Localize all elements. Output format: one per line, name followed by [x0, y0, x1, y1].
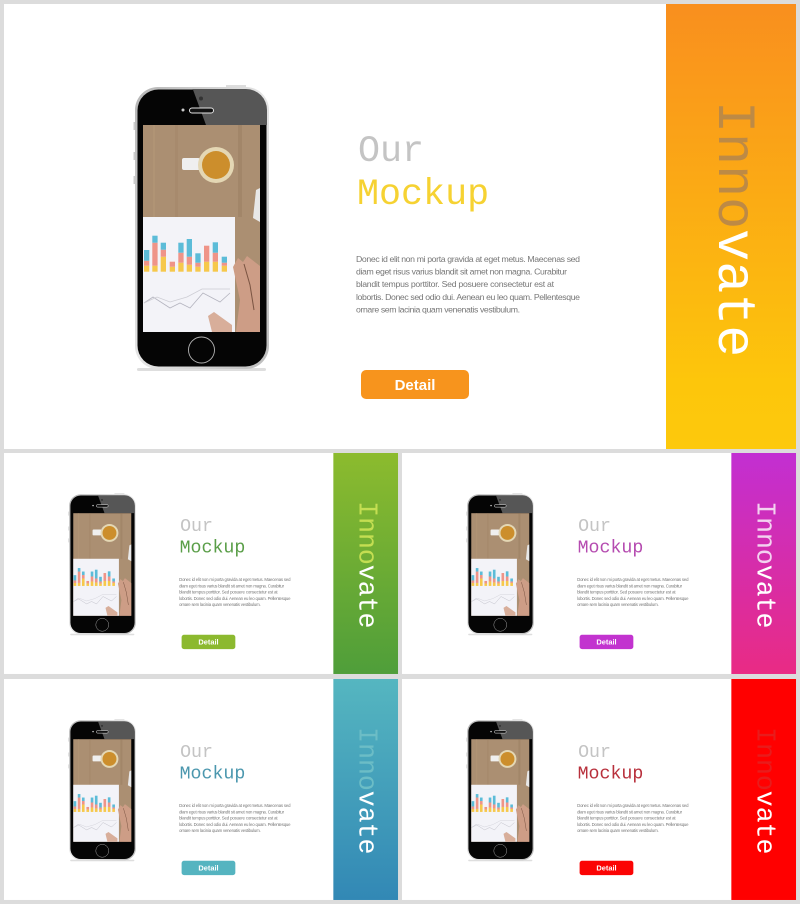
icon: smartphone mockup [466, 493, 534, 635]
button: Detail: Detail [395, 377, 435, 394]
heading: Mockup: Mockup [578, 764, 643, 784]
side band: orange gradient [666, 4, 796, 449]
text block: description: Donec id elit non mi porta gravida at eget metus. Maecenas sed [577, 803, 689, 808]
button: Detail: Detail [198, 638, 219, 647]
panel: green slide [4, 453, 398, 674]
heading: Our: Our [578, 743, 611, 763]
vertical label: Innovate: Inno vate [352, 501, 382, 628]
panel: teal slide [4, 679, 398, 900]
text block: description: Donec id elit non mi porta gravida at eget metus. Maecenas sed [356, 254, 580, 264]
heading: Mockup: Mockup [180, 764, 245, 784]
button: Detail [580, 635, 633, 649]
side band: red [731, 679, 796, 900]
button: Detail [580, 861, 633, 875]
button: Detail [361, 370, 469, 399]
text block: description: diam eget risus varius blandit sit amet non magna. Curabitur [179, 809, 285, 814]
text block: description: ornare sem lacinia quam venenatis vestibulum. [179, 602, 261, 607]
text block: description: lobortis. Donec sed odio dui. Aenean eu leo quam. Pellentesque [577, 822, 689, 827]
text block: description: Donec id elit non mi porta gravida at eget metus. Maecenas sed [179, 803, 291, 808]
panel: red slide [402, 679, 796, 900]
text block: description: ornare sem lacinia quam venenatis vestibulum. [577, 828, 659, 833]
icon: smartphone mockup [466, 719, 534, 861]
heading: Our: Our [358, 131, 424, 173]
heading: Mockup: Mockup [180, 538, 245, 558]
side band: teal gradient [333, 679, 398, 900]
text block: description [179, 803, 291, 833]
vertical label: Innovate: Inno vate [702, 101, 762, 357]
icon: smartphone mockup [68, 493, 136, 635]
button: Detail [182, 635, 235, 649]
text block: description: ornare sem lacinia quam venenatis vestibulum. [179, 828, 261, 833]
panel: large orange slide [4, 4, 796, 449]
heading: Mockup: Mockup [578, 538, 643, 558]
text block: description: blandit tempus porttitor. Sed posuere consectetur est at [356, 279, 555, 289]
heading: Mockup: Mockup [357, 174, 489, 216]
heading: Our: Our [180, 517, 213, 537]
text block: description: diam eget risus varius blandit sit amet non magna. Curabitur [577, 583, 683, 588]
heading: Our: Our [578, 517, 611, 537]
button: Detail: Detail [198, 864, 219, 873]
text block: description: ornare sem lacinia quam venenatis vestibulum. [356, 304, 520, 314]
text block: description: lobortis. Donec sed odio dui. Aenean eu leo quam. Pellentesque [356, 292, 580, 302]
panel: magenta slide [402, 453, 796, 674]
text block: description: blandit tempus porttitor. Sed posuere consectetur est at [577, 590, 676, 595]
side band: magenta gradient [731, 453, 796, 674]
icon: smartphone mockup [68, 719, 136, 861]
text block: description: blandit tempus porttitor. Sed posuere consectetur est at [179, 816, 278, 821]
text block: description: diam eget risus varius blandit sit amet non magna. Curabitur [179, 583, 285, 588]
button: Detail: Detail [596, 638, 617, 647]
icon: smartphone mockup [134, 85, 270, 371]
side band: green gradient [333, 453, 398, 674]
text block: description [356, 254, 580, 314]
text block: description: diam eget risus varius blandit sit amet non magna. Curabitur [356, 267, 567, 277]
text block: description: Donec id elit non mi porta gravida at eget metus. Maecenas sed [577, 577, 689, 582]
text block: description [577, 803, 689, 833]
button: Detail [182, 861, 235, 875]
vertical label: Innovate: Inno vate [352, 727, 382, 854]
text block: description: lobortis. Donec sed odio dui. Aenean eu leo quam. Pellentesque [577, 596, 689, 601]
heading: Our: Our [180, 743, 213, 763]
text block: description: lobortis. Donec sed odio dui. Aenean eu leo quam. Pellentesque [179, 822, 291, 827]
text block: description: ornare sem lacinia quam venenatis vestibulum. [577, 602, 659, 607]
text block: description: lobortis. Donec sed odio dui. Aenean eu leo quam. Pellentesque [179, 596, 291, 601]
text block: description: Donec id elit non mi porta gravida at eget metus. Maecenas sed [179, 577, 291, 582]
text block: description [179, 577, 291, 607]
vertical label: Innovate: Inno vate [750, 501, 780, 628]
text block: description [577, 577, 689, 607]
text block: description: blandit tempus porttitor. Sed posuere consectetur est at [577, 816, 676, 821]
text block: description: blandit tempus porttitor. Sed posuere consectetur est at [179, 590, 278, 595]
button: Detail: Detail [596, 864, 617, 873]
vertical label: Innovate: Inno vate [750, 727, 780, 854]
text block: description: diam eget risus varius blandit sit amet non magna. Curabitur [577, 809, 683, 814]
